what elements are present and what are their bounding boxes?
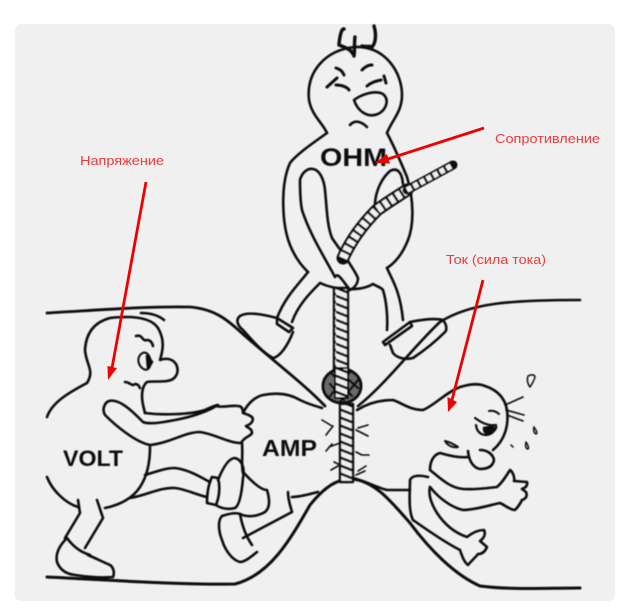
hills: upper and lower pipe walls	[47, 300, 580, 588]
OHM right arm	[375, 170, 403, 203]
sweat drops	[511, 375, 537, 449]
label: AMP: AMP	[262, 435, 317, 461]
OHM legs	[277, 268, 403, 330]
caption: voltage: Напряжение	[80, 153, 164, 168]
AMP head and body	[242, 384, 507, 490]
OHM hair	[339, 26, 375, 56]
AMP eye	[475, 418, 496, 435]
VOLT head and nose	[85, 317, 178, 413]
AMP stress hairs by rope	[322, 420, 369, 475]
VOLT right shoe	[207, 458, 244, 509]
AMP legs	[240, 473, 318, 545]
caption: resistance: Сопротивление	[495, 131, 600, 146]
character: VOLT	[47, 313, 253, 577]
VOLT brow and mouth	[125, 336, 153, 388]
VOLT body	[47, 383, 150, 508]
VOLT hair	[141, 313, 164, 320]
AMP lower arm and hand	[410, 476, 487, 565]
AMP shoe	[219, 513, 257, 562]
OHM body	[283, 133, 412, 272]
character: AMP	[219, 375, 537, 565]
label: VOLT: VOLT	[63, 446, 124, 471]
vertical rope with knot	[323, 288, 361, 482]
OHM left arm	[300, 169, 358, 290]
VOLT arm and hand	[104, 401, 253, 445]
AMP nose and mouth	[430, 450, 494, 470]
OHM face	[327, 65, 386, 90]
arrow: resistance	[375, 128, 484, 164]
OHM head	[309, 47, 402, 133]
VOLT left shoe	[57, 538, 114, 577]
caption: current: Ток (сила тока)	[446, 252, 546, 267]
VOLT legs	[65, 468, 210, 548]
character: OHM	[237, 26, 453, 359]
OHM mouth	[354, 92, 387, 115]
arrow: voltage	[108, 182, 146, 380]
illustration: Ohm's law cartoon	[47, 26, 580, 588]
rope through OHM hand	[343, 165, 453, 258]
AMP upper arm and hand	[430, 470, 527, 510]
OHM chin	[350, 122, 367, 127]
OHM left shoe	[237, 314, 293, 358]
arrow: current	[448, 280, 483, 412]
VOLT eye	[138, 353, 151, 370]
OHM right shoe	[383, 319, 446, 359]
AMP stress lines by head	[505, 397, 524, 421]
label: OHM: OHM	[320, 144, 387, 172]
